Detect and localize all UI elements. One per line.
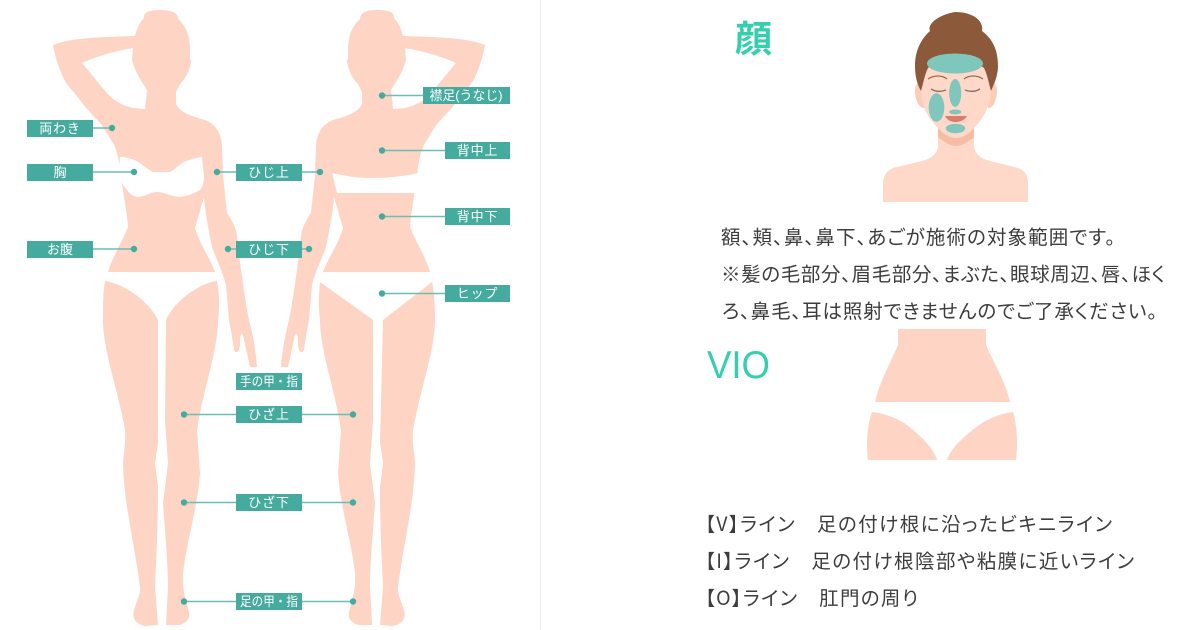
label: 背中上 (379, 142, 510, 159)
text block: face description: 額、頬、鼻、鼻下、あごが施術の対象範囲です。 (721, 221, 1115, 250)
label: お腹: お腹 (47, 242, 73, 257)
treatment zone: forehead (927, 54, 983, 74)
label: ひじ下: ひじ下 (248, 242, 290, 257)
icon: face illustration (883, 12, 1028, 202)
heading: VIO: VIO (707, 344, 770, 387)
label: ヒップ: ヒップ (457, 286, 498, 301)
treatment zone: under nose (949, 110, 961, 114)
heading: 顔: 顔 (735, 19, 772, 60)
front left leg (103, 281, 158, 626)
label: 背中上: 背中上 (457, 143, 498, 158)
text block: VIO lines: 【V】ライン 足の付け根に沿ったビキニライン (705, 508, 1112, 537)
eyebrows and eyes (928, 76, 983, 79)
front bra area (119, 157, 204, 197)
text block: VIO lines (705, 508, 1134, 611)
face (921, 62, 991, 138)
icon: VIO body illustration (867, 329, 1017, 460)
label: ひざ下: ひざ下 (248, 495, 290, 510)
label: ひじ上: ひじ上 (248, 165, 290, 180)
label: ヒップ (379, 285, 510, 302)
back body silhouette (281, 10, 485, 626)
label: ひざ上 (181, 406, 356, 423)
text block: face description: ※髪の毛部分、眉毛部分、まぶた、眼球周辺、唇、ほく (721, 258, 1165, 287)
label: 胸 (27, 164, 137, 181)
label: ひじ上 (214, 164, 323, 181)
label: 足の甲・指: 足の甲・指 (240, 594, 298, 609)
label: 襟足(うなじ) (379, 87, 510, 104)
label: 両わき: 両わき (39, 121, 81, 136)
text block: face description: ろ、鼻毛、耳は照射できませんのでご了承ください。 (722, 295, 1157, 324)
label: 胸: 胸 (53, 165, 67, 180)
text block: face description (721, 221, 1165, 324)
label: 背中下: 背中下 (457, 209, 498, 224)
shoulders and neck (883, 128, 1028, 202)
treatment zone: chin (946, 124, 965, 133)
label: ひざ上: ひざ上 (248, 407, 290, 422)
front right leg (163, 281, 219, 625)
back left leg (319, 282, 375, 625)
label: お腹 (27, 241, 137, 258)
treatment zone: cheek (929, 93, 944, 122)
front body silhouette (53, 10, 257, 626)
hair back (915, 12, 998, 91)
label: ひざ下 (181, 494, 356, 511)
label: 手の甲・指: 手の甲・指 (240, 374, 298, 389)
treatment zone: nose (949, 79, 961, 107)
text block: VIO lines: 【I】ライン 足の付け根陰部や粘膜に近いライン (705, 545, 1134, 574)
neck shadow (938, 126, 974, 146)
label: 背中下 (379, 208, 510, 225)
label: 襟足(うなじ): 襟足(うなじ) (430, 88, 502, 103)
lips (945, 116, 967, 122)
label: ひじ下 (225, 241, 312, 258)
label: 足の甲・指 (181, 593, 356, 610)
label: 両わき (27, 120, 115, 137)
back right leg (380, 282, 435, 626)
ears (915, 82, 926, 108)
back bra band (332, 173, 418, 193)
text block: VIO lines: 【O】ライン 肛門の周り (705, 582, 918, 611)
